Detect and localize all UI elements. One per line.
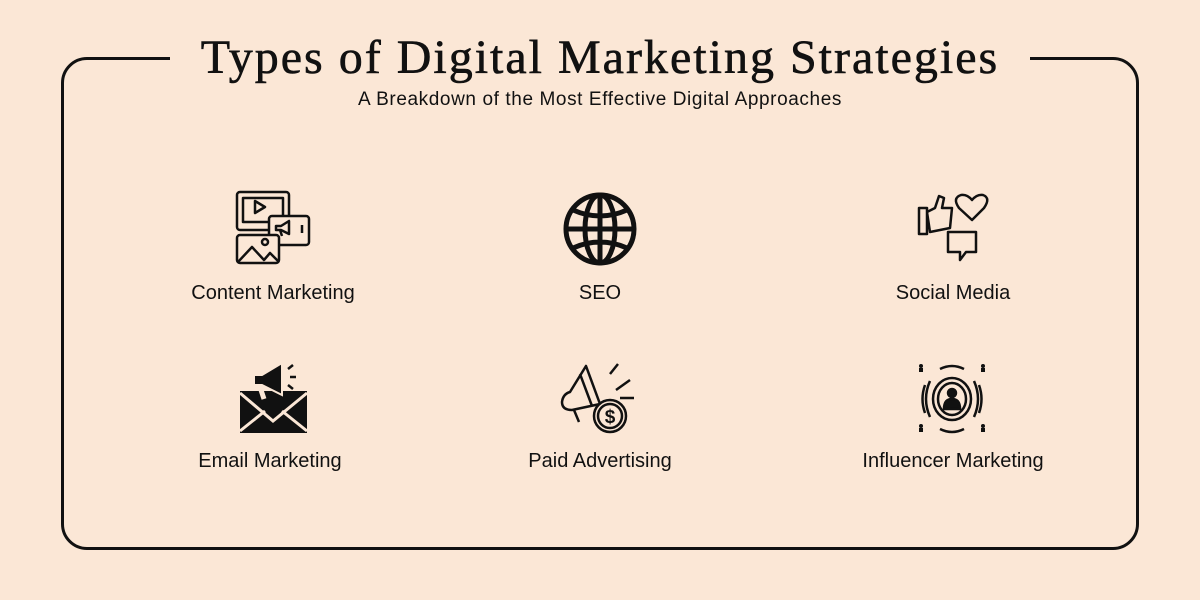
icon: globe: [564, 192, 636, 266]
icon: social media: [918, 194, 988, 262]
icon: influencer: [919, 364, 985, 434]
label: influencer marketing: Influencer Marketing: [862, 450, 1044, 472]
frame: [61, 57, 1139, 550]
label: email marketing: Email Marketing: [198, 450, 342, 472]
icon: email marketing: [240, 364, 307, 433]
icon: paid advertising: $: [605, 407, 616, 428]
label: content marketing: Content Marketing: [191, 282, 355, 304]
title: Types of Digital Marketing Strategies: [201, 31, 999, 84]
label: paid advertising: Paid Advertising: [528, 450, 672, 472]
icon: content marketing: [236, 190, 310, 264]
subtitle: A Breakdown of the Most Effective Digital Approaches: [358, 89, 842, 110]
icon: paid advertising: [560, 363, 634, 434]
label: social media: Social Media: [896, 282, 1010, 304]
label: SEO: SEO: [579, 282, 621, 304]
